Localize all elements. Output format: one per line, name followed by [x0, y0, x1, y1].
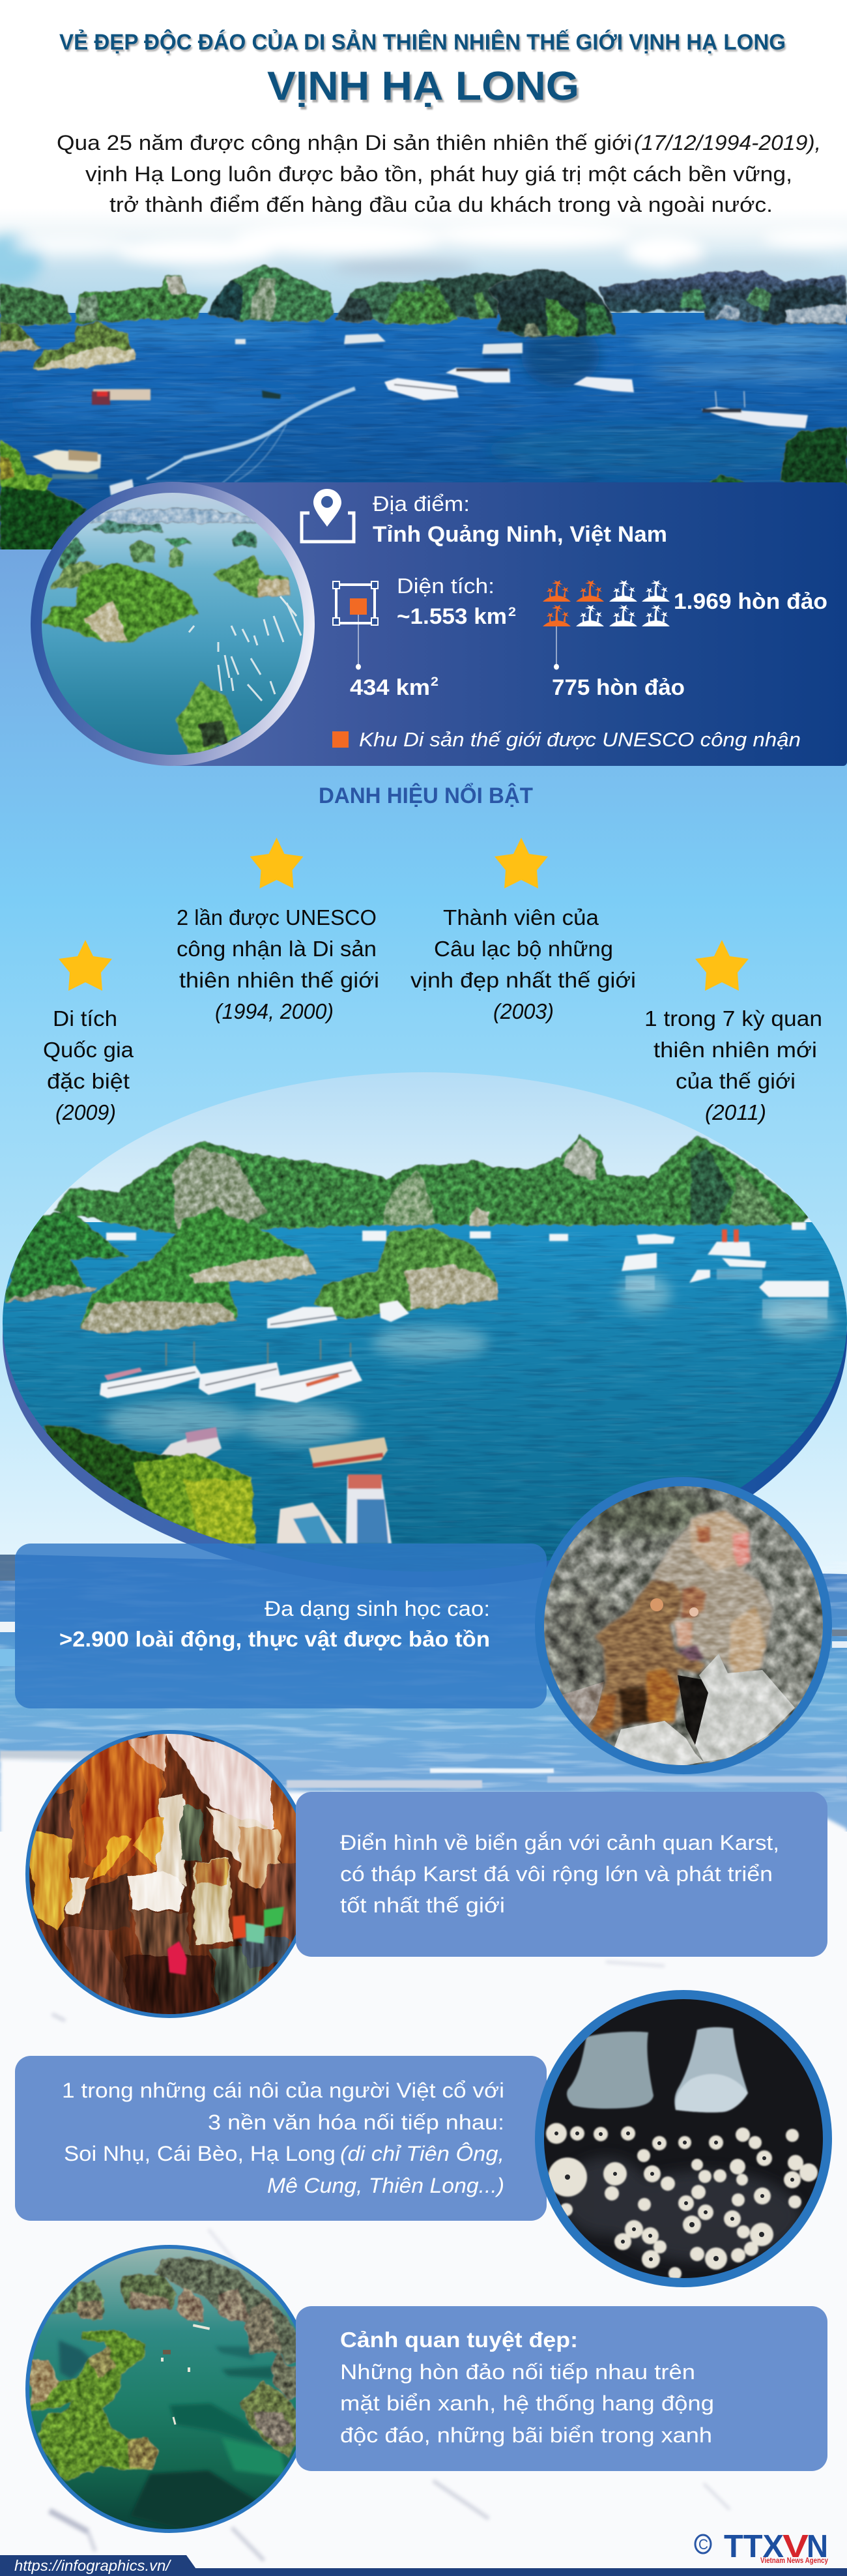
hero photo: bay with karst islands and boats: [0, 209, 847, 554]
heritage islands value: 775 hòn đảo: [552, 675, 685, 700]
intro paragraph: (17/12/1994-2019),: [634, 131, 821, 154]
box: karst landscape: [296, 1792, 827, 1957]
icon: star 1: [59, 940, 112, 991]
back karst range: [54, 1134, 811, 1233]
title line 1: VẺ ĐẸP ĐỘC ĐÁO CỦA DI SẢN THIÊN NHIÊN THẾ GIỚI VỊNH HẠ LONG: [59, 29, 786, 55]
box: scenic landscape: mặt biển xanh, hệ thống hang động: [340, 2392, 714, 2415]
box: ancient culture: 3 nền văn hóa nối tiếp nhau:: [208, 2111, 504, 2134]
intro paragraph: vịnh Hạ Long luôn được bảo tồn, phát huy giá trị một cách bền vững,: [85, 162, 792, 186]
award: new seven wonders: (2011): [705, 1100, 766, 1124]
intro paragraph: Qua 25 năm được công nhận Di sản thiên nhiên thế giới: [57, 131, 632, 154]
box: karst landscape: tốt nhất thế giới: [340, 1894, 505, 1917]
box: ancient culture: 1 trong những cái nôi của người Việt cổ với: [62, 2079, 504, 2102]
award: UNESCO recognition: công nhận là Di sản: [177, 937, 377, 961]
footer bar with url: https://infographics.vn/: [14, 2557, 172, 2574]
photo circle: monkeys: [535, 1477, 832, 1774]
award: beautiful bays club: vịnh đẹp nhất thế giới: [410, 968, 636, 992]
medallion photo: aerial bay: [31, 482, 315, 766]
heritage area value: 2: [431, 675, 438, 689]
award: new seven wonders: thiên nhiên mới: [653, 1038, 817, 1062]
award: national relic: Di tích: [53, 1006, 117, 1031]
logo: TTXVN: V: [782, 2529, 809, 2564]
award: UNESCO recognition: [177, 905, 379, 1023]
icon grid: palm islands: [543, 580, 670, 626]
icon: star 4: [695, 940, 749, 991]
foreground rock islands: [0, 321, 135, 370]
award: new seven wonders: 1 trong 7 kỳ quan: [644, 1006, 822, 1031]
award: beautiful bays club: Thành viên của: [443, 905, 599, 929]
distant boats: [106, 1222, 829, 1322]
stone axe right: [674, 2027, 748, 2113]
box: ancient culture: Soi Nhụ, Cái Bèo, Hạ Long: [64, 2142, 336, 2165]
back islands: [0, 265, 847, 326]
box: ancient culture: Mê Cung, Thiên Long...): [267, 2174, 504, 2197]
area value: ~1.553 km: [397, 604, 507, 629]
boats: [33, 334, 808, 495]
award: new seven wonders: của thế giới: [676, 1069, 796, 1093]
box: karst landscape: Điển hình về biển gắn với cảnh quan Karst,: [340, 1831, 779, 1854]
logo: TTXVN: [695, 2529, 828, 2565]
sand marks: [50, 1962, 730, 2560]
area label: Diện tích:: [397, 574, 495, 598]
award: beautiful bays club: Câu lạc bộ những: [434, 937, 613, 961]
big ellipse photo: bay with boats: [0, 1069, 847, 1587]
box: scenic landscape: [296, 2306, 827, 2471]
icon: star 3: [495, 838, 548, 888]
intro paragraph: trở thành điểm đến hàng đầu của du khách trong và ngoài nước.: [109, 193, 773, 216]
award: beautiful bays club: (2003): [493, 999, 554, 1023]
panel: location and area: [31, 482, 847, 766]
stone axe left: [567, 2032, 653, 2109]
area value: 2: [508, 606, 516, 619]
legend swatch: [332, 731, 349, 748]
logo: TTXVN: N: [807, 2529, 828, 2564]
logo: TTXVN: Vietnam News Agency: [760, 2556, 828, 2565]
title line 2: VỊNH HẠ LONG: [267, 64, 579, 109]
award: national relic: đặc biệt: [47, 1069, 130, 1093]
mid islands: [5, 1211, 130, 1301]
box: scenic landscape: Những hòn đảo nối tiếp nhau trên: [340, 2360, 695, 2384]
foreground trees: [0, 426, 847, 554]
award: UNESCO recognition: 2 lần được UNESCO: [177, 905, 377, 929]
box: ancient culture: [15, 2056, 547, 2221]
location value: Tỉnh Quảng Ninh, Việt Nam: [373, 522, 667, 547]
icon: star 2: [250, 838, 304, 888]
title line 1 shadow text: VẺ ĐẸP ĐỘC ĐÁO CỦA DI SẢN THIÊN NHIÊN THẾ GIỚI VỊNH HẠ LONG: [61, 31, 787, 57]
photo circle: aerial green bay: [25, 2245, 313, 2533]
photo circle: artifacts: [535, 1990, 832, 2287]
box: scenic landscape: Cảnh quan tuyệt đẹp:: [340, 2328, 578, 2352]
box: biodiversity: Đa dạng sinh học cao:: [265, 1597, 490, 1620]
legend text: Khu Di sản thế giới được UNESCO công nhận: [359, 728, 801, 751]
box: biodiversity: [15, 1544, 547, 1708]
award: national relic: [43, 1006, 134, 1124]
boat wake: [147, 388, 355, 484]
award: new seven wonders: [644, 1006, 822, 1124]
foreground trees: [43, 1426, 255, 1564]
award: beautiful bays club: [410, 905, 636, 1023]
box: scenic landscape: độc đáo, những bãi biển trong xanh: [340, 2423, 712, 2447]
icon: map pin: [302, 489, 354, 542]
box: biodiversity: >2.900 loài động, thực vật được bảo tồn: [59, 1627, 490, 1651]
icon: area square: [333, 581, 378, 625]
moored boats: [100, 1307, 392, 1544]
heading: awards: DANH HIỆU NỔI BẬT: [319, 783, 533, 808]
big dark island: [491, 269, 616, 337]
logo: TTXVN: C: [698, 2536, 708, 2553]
shell beads: [546, 2123, 818, 2280]
title: [59, 29, 787, 111]
title line 2 shadow text: VỊNH HẠ LONG: [269, 66, 581, 111]
award: national relic: (2009): [55, 1100, 116, 1124]
photo circle: cave: [25, 1730, 313, 2018]
award: national relic: Quốc gia: [43, 1038, 134, 1062]
heritage area value: 434 km: [350, 675, 430, 700]
box: karst landscape: có tháp Karst đá vôi rộng lớn và phát triển: [340, 1862, 773, 1886]
total islands: 1.969 hòn đảo: [674, 589, 827, 614]
connector: heritage islands: [554, 626, 559, 670]
award: UNESCO recognition: thiên nhiên thế giới: [179, 968, 379, 992]
location label: Địa điểm:: [373, 492, 470, 516]
logo: TTXVN: TTX: [724, 2529, 784, 2564]
connector: heritage area: [356, 615, 361, 670]
footer bar with url: [0, 2555, 847, 2576]
award: UNESCO recognition: (1994, 2000): [215, 999, 334, 1023]
box: ancient culture: (di chỉ Tiên Ông,: [340, 2142, 504, 2165]
intro paragraph: [57, 131, 821, 216]
